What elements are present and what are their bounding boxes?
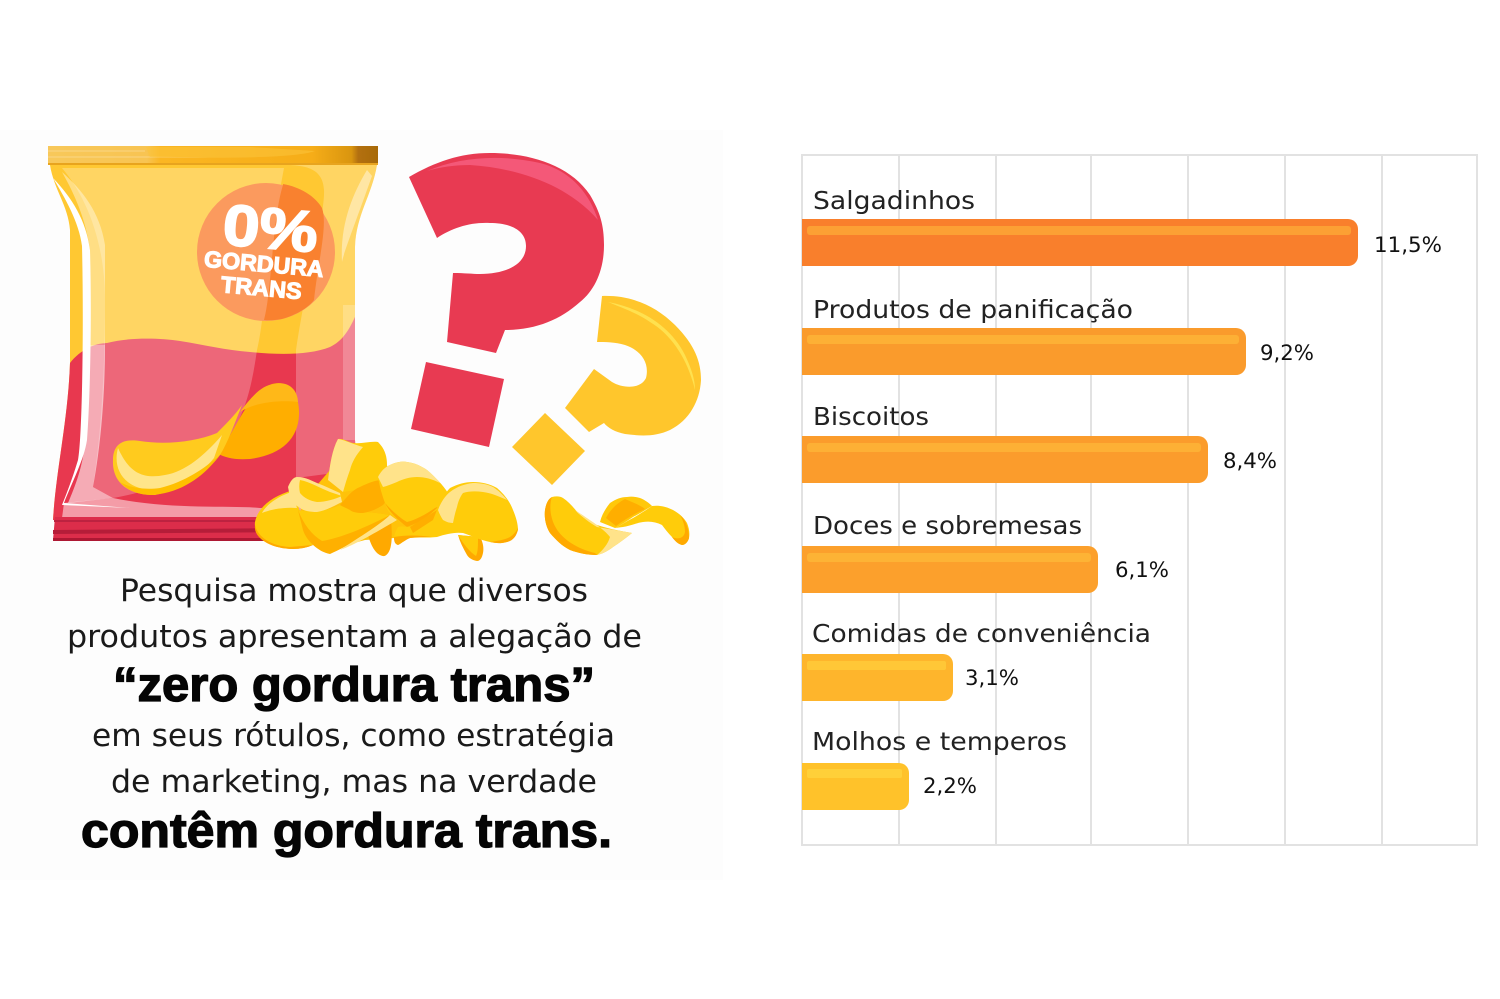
chip on bag [113, 383, 299, 495]
bar: Salgadinhos: Salgadinhos [813, 186, 975, 215]
chip: orange fold [340, 480, 388, 513]
bag top seal [48, 146, 378, 165]
bar: Doces e sobremesas: Doces e sobremesas [813, 511, 1082, 540]
bar: Produtos de panificação [802, 295, 1314, 375]
text block: description: de marketing, mas na verdade [111, 764, 597, 800]
bar: Biscoitos: 8,4% [1223, 449, 1277, 473]
left white highlight [53, 178, 130, 508]
pale lower film strip [62, 498, 302, 517]
badge: 0% gordura trans [197, 183, 335, 321]
bar: Molhos e temperos: Molhos e temperos [812, 727, 1067, 756]
badge: 0% gordura trans: GORDURA [203, 246, 325, 282]
bar: Comidas de conveniência: Comidas de conveniência [812, 619, 1151, 648]
text block: description: produtos apresentam a alegação de [67, 619, 642, 655]
light film overlay: right [284, 165, 378, 478]
bar: Molhos e temperos: 2,2% [923, 774, 977, 798]
bar: Salgadinhos [802, 186, 1442, 266]
chip: small drop [368, 520, 392, 556]
bag bottom seal [53, 517, 300, 541]
illustration: right chips [545, 496, 689, 555]
light film overlay: left [62, 168, 284, 498]
badge: 0% gordura trans: 0% [220, 192, 321, 265]
bar: Doces e sobremesas: 6,1% [1115, 558, 1169, 582]
chip: top [328, 439, 388, 492]
bar: Comidas de conveniência: 3,1% [965, 666, 1019, 690]
chip: far right drop [458, 535, 483, 561]
bar: Biscoitos: Biscoitos [813, 402, 929, 431]
infographic [48, 146, 1478, 858]
chip pile base [300, 470, 440, 548]
bar: Produtos de panificação: 9,2% [1260, 341, 1314, 365]
bar: Comidas de conveniência [802, 619, 1151, 701]
chip: back orange [600, 497, 652, 528]
heading: contêm gordura trans: contêm gordura trans. [81, 805, 612, 858]
bar: Biscoitos [802, 402, 1277, 483]
icon: red question mark [409, 153, 604, 447]
bar chart [802, 155, 1477, 845]
illustration: pile of chips [255, 439, 518, 561]
bar: Salgadinhos: 11,5% [1374, 233, 1442, 257]
chip: long curl [615, 506, 689, 545]
chip: left [255, 490, 313, 549]
text block: description: em seus rótulos, como estratégia [92, 718, 615, 754]
illustration: snack bag [45, 146, 385, 541]
bar: Produtos de panificação: Produtos de panificação [813, 295, 1133, 324]
bar: Molhos e temperos [802, 727, 1067, 810]
chip: right big [394, 482, 518, 545]
chip: lower middle [298, 505, 390, 554]
bar: Doces e sobremesas [802, 511, 1169, 593]
badge: 0% gordura trans: TRANS [220, 271, 303, 304]
panel: left background [0, 130, 723, 880]
text block: description [67, 573, 642, 858]
heading: zero gordura trans: “zero gordura trans” [113, 659, 595, 712]
text block: description: Pesquisa mostra que diversos [120, 573, 588, 609]
chip: fold [288, 477, 342, 512]
chip: center right [378, 462, 448, 527]
chip: left curl [545, 496, 632, 555]
icon: yellow question mark [512, 296, 701, 485]
